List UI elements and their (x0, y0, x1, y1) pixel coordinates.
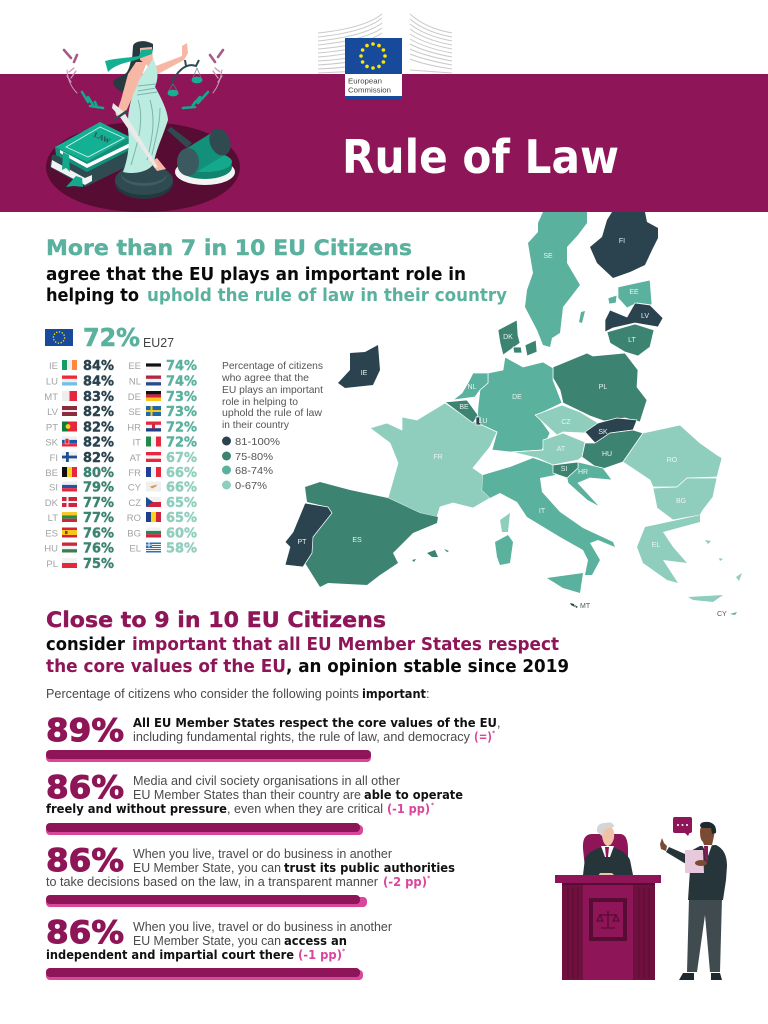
intro line: important (362, 686, 426, 701)
map of Europe (285, 212, 742, 615)
DK (498, 320, 537, 356)
subheading: EU role: uphold the rule of law in their country (147, 286, 508, 306)
EU27 stat (45, 323, 174, 352)
PL (553, 353, 647, 422)
map labels: PT (298, 539, 307, 546)
row IT (133, 434, 197, 450)
pedestal (115, 163, 173, 199)
map labels: EL (652, 542, 660, 549)
map labels: RO (667, 457, 678, 464)
logo: European Commission: European (348, 76, 382, 86)
subheading: EU role: helping to (46, 286, 139, 306)
head (700, 823, 714, 845)
figure (105, 41, 188, 173)
row FR: FR (128, 468, 141, 479)
row MT: MT (44, 392, 58, 403)
item: 86% public authorities: When you live, travel or do business in another (133, 847, 392, 861)
legs (687, 898, 722, 972)
row HR: 72% (166, 420, 197, 436)
row NL: NL (129, 376, 141, 388)
row NL (129, 374, 197, 390)
intro line: : (426, 687, 429, 701)
item: 89% core values: 89% (46, 713, 124, 749)
LT (607, 324, 654, 356)
map legend keys: 68-74% (235, 465, 273, 477)
item: 86% independent court: (-1 pp) (298, 947, 342, 962)
row LT: LT (48, 513, 58, 524)
CY (730, 612, 737, 615)
row FI: 82% (83, 450, 114, 466)
item: 86% independent court: EU Member State, you can (133, 934, 281, 948)
item: 89% core values: * (492, 730, 496, 737)
shadow ellipse (46, 122, 240, 212)
illustration: Berlaymont building (318, 14, 452, 73)
wreath right (183, 50, 223, 108)
row CY: CY (128, 482, 142, 494)
map labels: DE (512, 394, 522, 401)
item: 86% media: , even when they are critical (227, 802, 383, 816)
row RO: RO (127, 513, 141, 524)
item: 86% media: 86% (46, 770, 124, 806)
RO (623, 425, 722, 487)
item: 89% core values: (=) (474, 729, 492, 744)
map labels: AT (557, 446, 566, 453)
IE (338, 345, 380, 388)
map labels: LV (641, 313, 649, 320)
scales (168, 60, 202, 96)
subheading: core values (46, 635, 569, 677)
row CZ: 65% (166, 495, 197, 511)
map labels: HR (578, 469, 588, 476)
EU27 stat: EU27 (143, 335, 174, 350)
CZ (535, 405, 598, 435)
map labels: MT (580, 603, 591, 610)
NL (453, 373, 488, 400)
item: 86% independent court: 86% (46, 915, 124, 951)
subheading: core values: the core values of the EU (46, 657, 286, 677)
map labels: SI (561, 466, 567, 473)
map legend keys: 81-100% (235, 436, 280, 448)
item: 86% public authorities: to take decisions based on the law, in a transparent manner (46, 875, 378, 889)
map legend keys (222, 436, 280, 492)
row ES: 76% (83, 526, 114, 542)
row IE: IE (49, 361, 58, 372)
AT (512, 433, 585, 465)
logo: European Commission: Commission (348, 86, 391, 94)
row IT: IT (133, 438, 141, 448)
BG (653, 478, 717, 520)
map legend keys: 0-67% (235, 480, 267, 492)
row EE (128, 358, 197, 374)
row SI: 79% (83, 480, 114, 496)
row PL: 75% (83, 556, 114, 572)
item: 86% public authorities: (-2 pp) (383, 874, 427, 889)
map labels (298, 238, 727, 618)
HU (582, 430, 643, 470)
MT (570, 603, 578, 608)
row BG (127, 526, 197, 542)
row MT (44, 389, 114, 405)
row DE: DE (128, 392, 141, 403)
ES (305, 482, 449, 587)
row NL: 74% (166, 374, 197, 390)
row DE: 73% (166, 389, 197, 405)
row MT: 83% (83, 389, 114, 405)
country table column 1 (44, 358, 114, 572)
row EL: EL (129, 544, 141, 554)
row FR: 66% (166, 465, 197, 481)
speech bubble (673, 817, 692, 836)
row IT: 72% (166, 434, 197, 450)
row LT: 77% (83, 510, 114, 526)
book stack (50, 122, 130, 187)
raised hand (660, 838, 667, 851)
book stack: LAW (92, 130, 112, 146)
row HR: HR (127, 422, 141, 434)
wreath left (64, 50, 103, 108)
row LV (47, 404, 114, 420)
item: 86% media: Media and civil society organisations in all other (133, 774, 400, 788)
map legend text: in their country (222, 419, 290, 431)
row SK: 82% (83, 434, 114, 450)
row PT (46, 420, 114, 436)
Corsica (500, 513, 510, 532)
map labels: ES (352, 537, 362, 544)
row LV: LV (47, 407, 59, 418)
row ES: ES (45, 528, 58, 540)
row AT: 67% (166, 450, 197, 466)
row IE: 84% (83, 358, 114, 374)
row IE (49, 358, 114, 374)
header band (0, 74, 768, 212)
row DE (128, 389, 197, 405)
IT (482, 458, 615, 593)
row DK: 77% (83, 495, 114, 511)
section heading: close to 9 in 10: Close to 9 in 10 EU Citizens (46, 608, 386, 633)
item: 86% independent court (46, 915, 392, 980)
BE (445, 400, 478, 423)
DE (477, 357, 562, 452)
item: 86% public authorities (46, 843, 455, 907)
map labels: DK (503, 334, 513, 341)
item: 86% public authorities: EU Member State, you can (133, 861, 281, 875)
illustration: lady justice with law books and gavel (46, 41, 240, 212)
map legend text: role in helping to (222, 396, 298, 408)
row AT (130, 450, 197, 466)
logo: European Commission (345, 38, 402, 99)
row CY: 66% (166, 480, 197, 496)
row HU: 76% (83, 540, 114, 556)
section heading: more than 7 in 10: More than 7 in 10 EU Citizens (46, 236, 412, 261)
row SE: 73% (166, 404, 197, 420)
row DK (45, 495, 114, 511)
item: 86% media: (-1 pp) (387, 801, 430, 816)
SE (525, 212, 587, 347)
map labels: EE (629, 289, 639, 296)
item: 86% media (46, 770, 463, 835)
subheading: core values: consider (46, 635, 125, 655)
row CZ (128, 495, 197, 511)
row EL: 58% (166, 540, 197, 556)
row ES (45, 526, 114, 542)
map labels: LU (479, 418, 487, 425)
judge robe (583, 847, 633, 875)
map labels: PL (599, 384, 607, 391)
item: 89% core values: All EU Member States respect the core values of the EU (133, 715, 497, 730)
row FR (128, 465, 197, 481)
map labels: FI (619, 238, 625, 245)
intro line: Percentage of citizens who consider the following points (46, 687, 359, 701)
subheading: EU role: agree that the EU plays an important role in (46, 265, 466, 285)
map labels: BE (459, 404, 469, 411)
row SK (45, 434, 114, 450)
item: 86% media: EU Member States than their country are (133, 788, 361, 802)
bench body (562, 883, 655, 980)
row BG: 60% (166, 526, 197, 542)
item: 86% media: freely and without pressure (46, 801, 227, 816)
row FI: FI (50, 453, 58, 464)
row LU (46, 374, 114, 390)
SI (553, 462, 578, 478)
map labels: FR (433, 454, 443, 461)
row LT (48, 510, 114, 526)
map legend text (221, 360, 323, 431)
map legend text: EU plays an important (222, 384, 323, 396)
map labels: IT (539, 508, 546, 515)
row HU (44, 540, 114, 556)
item: 86% public authorities: * (427, 875, 431, 882)
row HU: HU (44, 544, 58, 554)
gavel (167, 125, 235, 185)
item: 86% independent court: * (342, 948, 346, 955)
item: 86% public authorities: trust its public authorities (284, 860, 455, 875)
FR (370, 403, 497, 517)
SK (585, 418, 637, 443)
item: 86% media: * (431, 802, 435, 809)
LV (605, 303, 663, 332)
row BG: BG (127, 528, 141, 540)
country table column 2 (127, 358, 197, 556)
row SI: SI (49, 482, 58, 494)
EE (608, 280, 652, 308)
PT (285, 503, 332, 567)
map labels: SK (598, 429, 608, 436)
LU (476, 417, 481, 425)
item: 86% media: able to operate (364, 787, 463, 802)
row BE: 80% (83, 465, 114, 481)
subheading: core values: important that all EU Member States respect (132, 635, 559, 655)
chair (583, 834, 628, 868)
EL (637, 515, 742, 602)
map legend text: Percentage of citizens (222, 360, 323, 372)
map legend text: uphold the rule of law (222, 407, 322, 419)
row SI (49, 480, 114, 496)
map labels: NL (468, 384, 477, 391)
paper (685, 850, 704, 873)
item: 86% independent court: When you live, travel or do business in another (133, 920, 392, 934)
FI (590, 212, 658, 278)
row PL (46, 556, 114, 572)
item: 89% core values (46, 713, 500, 762)
row CZ: CZ (128, 498, 141, 509)
row PT: 82% (83, 420, 114, 436)
row BE (45, 465, 114, 481)
row PT: PT (46, 422, 58, 434)
item: 89% core values: including fundamental rights, the rule of law, and democracy (133, 730, 471, 744)
map labels: CY (717, 611, 727, 618)
map labels: CZ (561, 419, 571, 426)
subheading: EU role (46, 265, 508, 306)
row EE: EE (128, 361, 141, 372)
map labels: BG (676, 498, 686, 505)
item: 86% independent court: access an (284, 933, 347, 948)
row CY (128, 480, 197, 496)
row DK: DK (45, 498, 59, 509)
row HR (127, 420, 197, 436)
row SE (128, 404, 197, 420)
item: 86% independent court: independent and impartial court there (46, 947, 294, 962)
illustration: judge at bench (555, 822, 661, 980)
jacket (666, 845, 727, 900)
row EE: 74% (166, 358, 197, 374)
row EL (129, 540, 197, 556)
HR (567, 462, 612, 507)
map legend keys: 75-80% (235, 451, 273, 463)
row BE: BE (45, 468, 58, 479)
row FI (50, 450, 114, 466)
row SE: SE (128, 407, 141, 418)
item: 89% core values: , (497, 716, 500, 730)
illustration: lawyer with speech bubble (660, 817, 727, 980)
Gotland and Aland (579, 311, 585, 323)
row LV: 82% (83, 404, 114, 420)
map labels: HU (602, 451, 612, 458)
title: Rule of Law (342, 130, 619, 184)
row RO: 65% (166, 510, 197, 526)
map labels: SE (543, 253, 553, 260)
row RO (127, 510, 197, 526)
subheading: core values: , an opinion stable since 2019 (286, 657, 569, 677)
bench panel with scales (589, 898, 627, 941)
row LU: 84% (83, 374, 114, 390)
row SK: SK (45, 438, 59, 448)
map labels: LT (628, 337, 637, 344)
map labels: IE (361, 370, 368, 377)
map legend text: who agree that the (221, 372, 309, 384)
row LU: LU (46, 376, 58, 388)
item: 86% public authorities: 86% (46, 843, 124, 879)
row AT: AT (130, 453, 141, 464)
EU27 stat: 72% (83, 323, 140, 352)
row PL: PL (46, 559, 58, 570)
